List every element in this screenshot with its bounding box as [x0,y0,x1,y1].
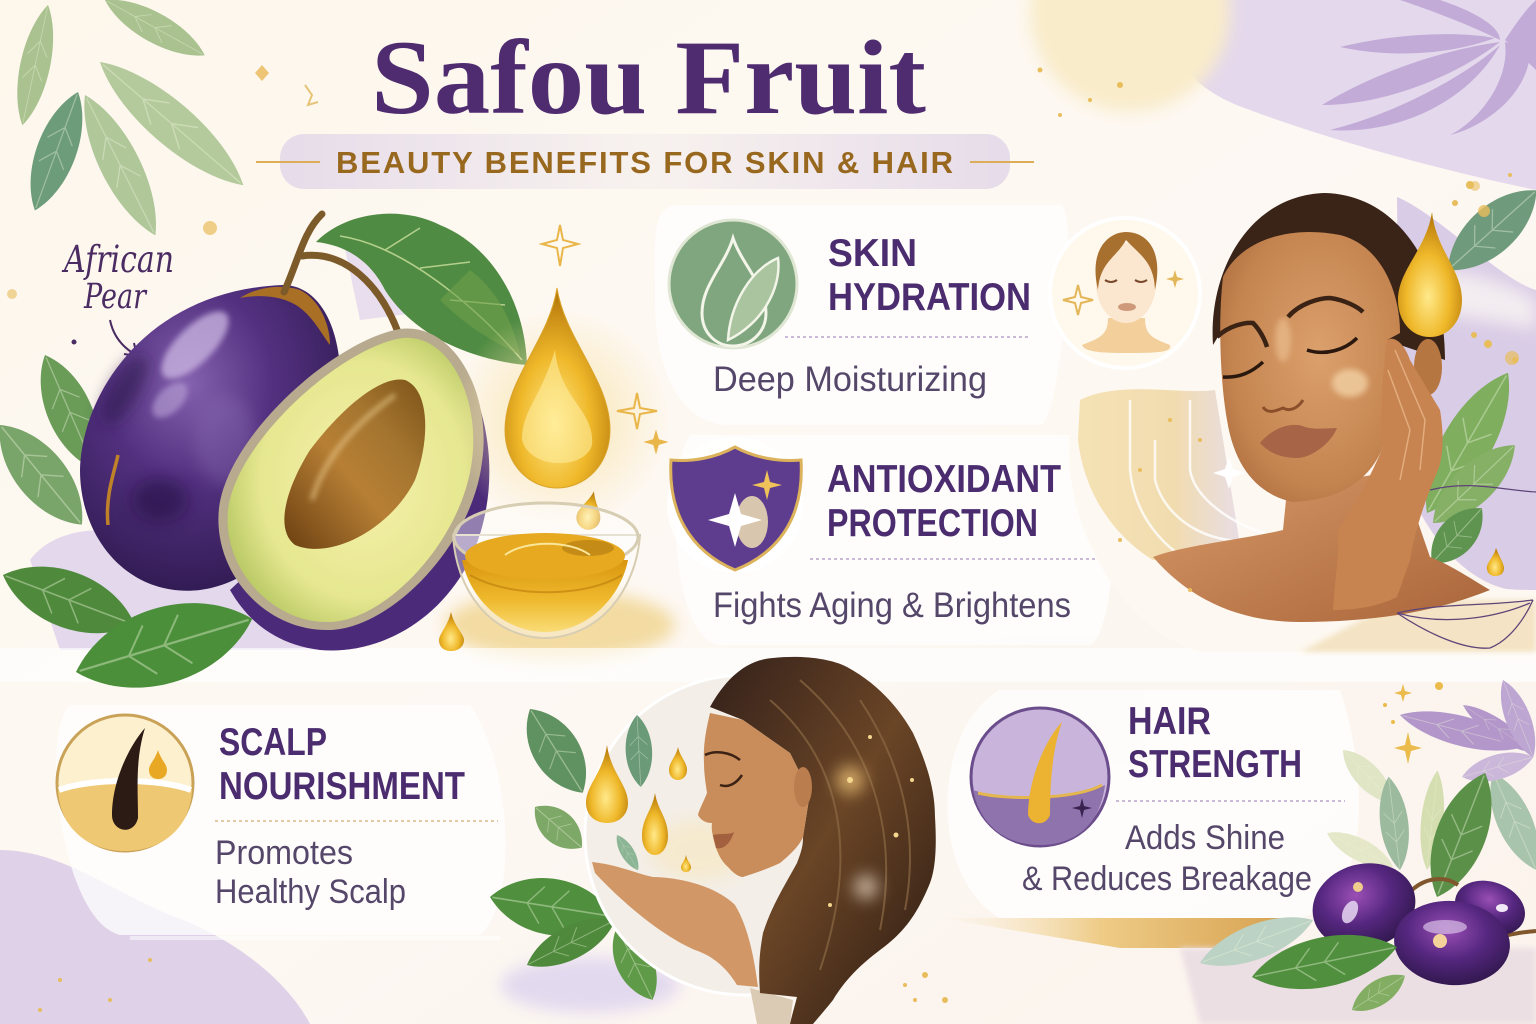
gold oil drop [1398,212,1462,337]
background foliage [1194,676,1536,979]
fine line sprig [1397,486,1536,648]
cupped hands [592,862,758,987]
hair [710,657,936,1024]
fruit stems [284,214,398,332]
annotation: African Pear: African [62,238,174,281]
ear [794,767,812,807]
small falling drop [574,489,606,532]
top leaf [316,214,527,365]
benefit: hair strength: HAIR [1128,700,1211,743]
illustration: hair portrait [486,657,936,1024]
small oil drop [1487,548,1504,576]
sparkle [1213,457,1245,489]
benefit: antioxidant protection: ANTIOXIDANT [827,458,1061,501]
subtitle banner: BEAUTY BENEFITS FOR SKIN & HAIR [336,145,953,180]
leaves behind fruit [0,346,145,651]
portrait panel [1069,340,1536,652]
cut half fruit [218,329,489,650]
golden wave backdrop [1078,389,1240,560]
sparkles [1383,682,1443,764]
front leaves [1247,923,1402,1001]
circle panel [585,675,905,995]
nose and mouth [1263,400,1303,411]
benefit: hair strength: & Reduces Breakage [1022,860,1312,898]
sparkles top [255,65,1123,117]
benefit: antioxidant protection: PROTECTION [827,502,1038,545]
cloth [750,988,793,1024]
icon: hair follicle [57,715,193,851]
skin highlights [1332,369,1368,397]
neck and shoulders [1153,470,1490,622]
benefit: scalp nourishment: Promotes [215,834,353,872]
subtitle banner [256,134,1034,189]
illustration: glowing skin portrait [1069,173,1536,652]
benefit: skin hydration: SKIN [828,232,917,275]
large oil drop [505,288,610,488]
benefit: antioxidant protection [667,437,1135,625]
annotation: African Pear: Pear [83,277,148,317]
stems [1412,879,1536,937]
side leaves [1406,173,1536,575]
glass bowl [453,535,640,638]
eyebrows and eyes [1217,298,1363,347]
leaves [486,697,669,1008]
benefit: hair strength: Adds Shine [1125,819,1285,857]
face profile [698,713,810,877]
benefit: scalp nourishment: SCALP [219,721,327,764]
illustration: safou fruit [0,214,527,708]
icon: strong hair [971,708,1109,846]
decorative leaves top right [1322,0,1536,135]
benefit: scalp nourishment: Healthy Scalp [215,873,406,911]
icon: shield [667,437,803,573]
benefit: hair strength [971,700,1345,898]
benefit: antioxidant protection: Fights Aging & Brightens [713,586,1071,625]
decorative leaves top left [8,0,257,244]
illustration: purple fruit cluster [1194,676,1536,1020]
illustration: oil drop and bowl [439,225,670,651]
hand [1333,339,1443,610]
benefit: scalp nourishment: NOURISHMENT [219,765,465,808]
benefit: skin hydration: HYDRATION [828,276,1031,319]
hair strands and highlights [770,680,914,970]
sparkles [542,225,665,451]
facial features [705,752,742,786]
panel: benefit cards backdrop [56,205,1359,935]
face [1220,232,1400,502]
benefit: skin hydration: Deep Moisturizing [713,360,987,399]
icon: facial glow badge [1050,218,1200,368]
inner leaves [611,714,654,874]
benefit: scalp nourishment [57,715,498,911]
benefit: skin hydration [669,220,1031,399]
icon: leaf drop [669,220,797,348]
small drop on table [439,612,464,651]
title: Safou Fruit [371,19,926,136]
annotation: African Pear [62,238,174,356]
oil drops [586,745,691,872]
hair [1213,193,1445,360]
front leaf [65,582,263,708]
berries [1447,871,1533,945]
ear [1414,339,1442,395]
whole purple fruit [80,285,341,591]
benefit: hair strength: STRENGTH [1128,743,1302,786]
